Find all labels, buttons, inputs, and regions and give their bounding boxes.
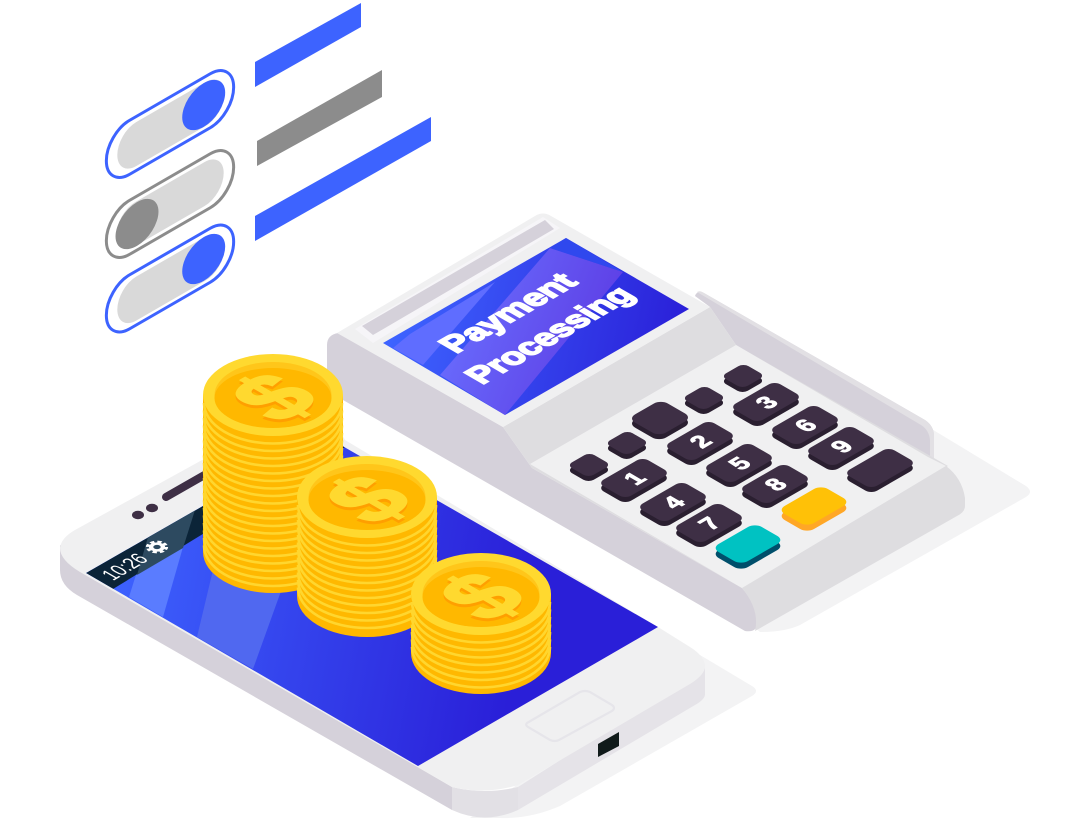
screen title: Payment — [430, 268, 585, 358]
phone right side — [518, 668, 705, 810]
status bar clock: 10:26 — [96, 550, 154, 584]
label bar: grey middle — [257, 70, 382, 166]
terminal left side — [327, 333, 758, 631]
key 1 — [598, 457, 670, 504]
dollar sign: $ — [210, 360, 340, 435]
smartphone — [60, 395, 756, 818]
key 5: 5 — [723, 454, 758, 474]
home button — [526, 691, 614, 741]
key 7: 7 — [693, 514, 728, 534]
key 1: 1 — [618, 469, 653, 489]
key 6 — [769, 404, 841, 451]
terminal wall highlight — [697, 291, 934, 462]
charging port — [598, 732, 619, 757]
terminal top face — [337, 214, 710, 427]
key 9: 9 — [825, 437, 860, 457]
terminal keypad face — [530, 345, 946, 588]
coin stack: medium — [297, 456, 437, 637]
key 4: 4 — [657, 492, 692, 513]
dollar sign: $ — [418, 559, 548, 634]
dollar sign: $ — [304, 465, 434, 540]
label bar: blue top — [255, 3, 361, 87]
key 3 — [730, 381, 802, 428]
key 3: 3 — [750, 393, 785, 413]
toggle switches — [106, 60, 234, 342]
speaker slot — [166, 469, 215, 497]
phone ground shadow — [470, 655, 756, 818]
phone bottom corner — [452, 787, 518, 818]
key 9 — [805, 425, 877, 472]
toggle: on, bottom — [106, 215, 234, 342]
key 2: 2 — [684, 432, 719, 452]
receipt slot — [355, 217, 560, 343]
coin stack: short — [411, 553, 551, 694]
terminal screen — [383, 238, 689, 415]
function keys — [567, 363, 916, 494]
dollar sign: $ — [418, 562, 548, 637]
key 6: 6 — [789, 416, 824, 436]
dollar sign: $ — [210, 363, 340, 438]
coin stack: tall — [203, 354, 343, 593]
phone left side — [60, 545, 452, 810]
yellow key — [778, 485, 850, 533]
dollar sign: $ — [304, 462, 434, 537]
key 8: 8 — [759, 475, 794, 495]
key 7 — [673, 502, 745, 549]
phone top face — [60, 395, 705, 791]
toggle: on, top — [106, 60, 234, 188]
status bar — [86, 436, 345, 589]
terminal ground shadow — [745, 428, 1030, 632]
key 5 — [703, 442, 775, 489]
terminal sloped panel — [503, 307, 948, 588]
front camera dots — [132, 504, 158, 519]
label bar: blue bottom — [255, 117, 431, 241]
terminal back wall — [695, 292, 934, 462]
terminal front right — [742, 466, 965, 631]
icon: settings gear — [144, 540, 170, 554]
keypad — [567, 363, 916, 571]
key 8 — [739, 463, 811, 510]
payment terminal — [327, 214, 1030, 632]
phone screen — [86, 436, 658, 766]
screen title second line: Processing — [456, 281, 642, 389]
key 2 — [664, 420, 736, 467]
teal key — [712, 523, 784, 571]
toggle: off, middle — [106, 140, 234, 268]
key 4 — [637, 481, 709, 528]
